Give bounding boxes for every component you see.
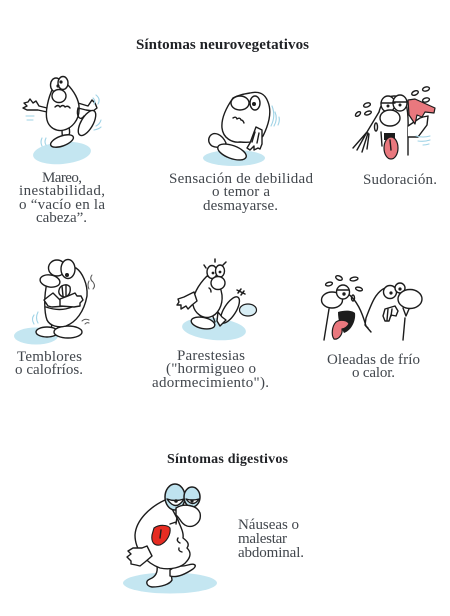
shadow — [203, 150, 265, 166]
caption: Náuseas o — [238, 517, 299, 533]
character: faint — [209, 92, 270, 163]
caption: Oleadas de frío — [327, 352, 420, 368]
caption — [152, 348, 269, 391]
panel: náuseas — [123, 484, 304, 594]
tingling marks — [204, 259, 245, 295]
character: sweating — [353, 95, 435, 159]
motion lines — [26, 95, 101, 146]
shadow — [14, 328, 58, 344]
caption: adormecimiento"). — [152, 375, 269, 391]
heading: síntomas digestivos: Síntomas digestivos — [167, 452, 289, 467]
caption: abdominal. — [238, 545, 304, 561]
caption: ("hormigueo o — [166, 361, 256, 377]
caption — [169, 171, 314, 214]
motion lines — [82, 275, 94, 324]
caption — [238, 517, 304, 561]
caption — [19, 170, 105, 226]
motion lines — [271, 106, 279, 126]
caption: o calofríos. — [15, 362, 83, 378]
caption: malestar — [238, 531, 287, 547]
caption: Sudoración. — [363, 172, 437, 188]
shadow — [32, 140, 92, 166]
caption: o calor. — [352, 365, 395, 381]
caption: Mareo, — [42, 170, 82, 186]
panel: mareo — [19, 76, 105, 226]
character: dizzy — [23, 76, 99, 150]
caption: inestabilidad, — [19, 183, 105, 199]
caption: Sensación de debilidad — [169, 171, 314, 187]
right character: cold — [365, 283, 422, 340]
panel: sudoración — [353, 86, 437, 188]
sweat drops — [355, 86, 430, 131]
character: trembling — [36, 260, 87, 338]
caption — [327, 352, 420, 381]
caption: cabeza”. — [36, 210, 87, 226]
caption: desmayarse. — [203, 198, 278, 214]
panel: oleadas — [322, 275, 422, 381]
panel: temblores — [14, 260, 94, 378]
caption: o temor a — [212, 184, 270, 200]
caption — [15, 349, 83, 378]
sweat drops — [325, 275, 363, 301]
panel: parestesias — [152, 259, 269, 391]
shadow — [181, 315, 247, 343]
title: síntomas neurovegetativos: Síntomas neurovegetativos — [136, 37, 309, 53]
motion lines — [416, 136, 430, 145]
left character: hot — [322, 285, 368, 340]
character: nausea — [127, 484, 200, 587]
caption: o “vacío en la — [19, 197, 105, 213]
shadow — [123, 572, 217, 594]
character: tingling — [177, 265, 256, 331]
caption: Temblores — [17, 349, 82, 365]
panel: debilidad — [169, 92, 314, 214]
caption: Parestesias — [177, 348, 245, 364]
